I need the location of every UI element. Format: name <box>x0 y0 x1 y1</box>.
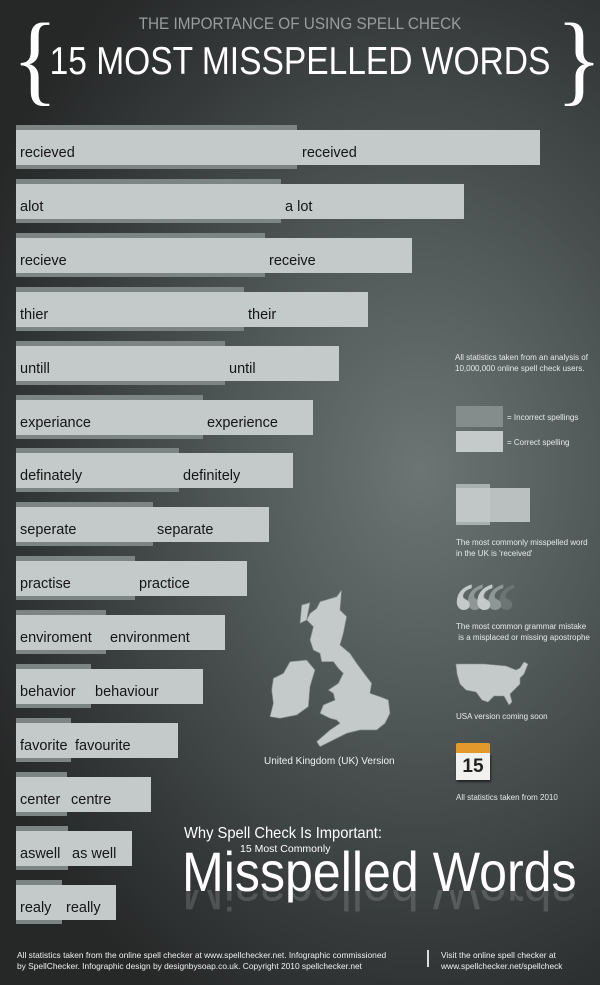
bar chart: realy <box>20 900 51 916</box>
big words: Misspelled Words <box>182 840 577 903</box>
footer link <box>441 950 562 971</box>
bar chart: practise <box>20 576 71 592</box>
bottom title <box>182 825 577 920</box>
bar chart: recieve <box>20 253 67 269</box>
bar chart: experiance <box>20 415 91 431</box>
bar chart: received <box>302 145 357 161</box>
bar chart: behaviour <box>95 684 159 700</box>
footer credits: All statistics taken from the online spell checker at www.spellchecker.net. Infographic commissioned <box>17 950 386 960</box>
why heading: Why Spell Check Is Important: <box>184 825 382 842</box>
icon: calendar: 15 <box>462 756 484 777</box>
bar chart: centre <box>71 792 111 808</box>
text: grammar note: The most common grammar mistake <box>456 622 586 631</box>
bar chart: alot <box>20 199 43 215</box>
bar chart: enviroment <box>20 630 92 646</box>
text: received note: The most commonly misspelled word in the UK is 'received' <box>456 538 588 558</box>
subtitle: THE IMPORTANCE OF USING SPELL CHECK <box>139 14 461 33</box>
bar chart: a lot <box>285 199 312 215</box>
legend: = Correct spelling <box>507 438 569 447</box>
bar chart: behavior <box>20 684 76 700</box>
footer credits <box>17 950 386 971</box>
stats note: All statistics taken from an analysis of 10,000,000 online spell check users. <box>455 353 588 373</box>
bar chart: until <box>229 361 256 377</box>
text: year note: All statistics taken from 2010 <box>456 793 558 802</box>
bar chart: seperate <box>20 522 76 538</box>
bar chart: their <box>248 307 276 323</box>
bar chart: environment <box>110 630 190 646</box>
bar chart: recieved <box>20 145 75 161</box>
UK map <box>270 590 390 747</box>
bar chart: center <box>20 792 60 808</box>
bar chart: separate <box>157 522 213 538</box>
UK label: United Kingdom (UK) Version <box>264 756 395 767</box>
bar chart: favorite <box>20 738 68 754</box>
bar chart: thier <box>20 307 48 323</box>
icon: quote marks: “ <box>474 562 518 673</box>
bar chart: definitely <box>183 468 240 484</box>
bar chart: really <box>66 900 101 916</box>
bar chart: definately <box>20 468 82 484</box>
icon: USA map <box>456 662 528 706</box>
text: grammar note <box>456 622 590 642</box>
icon: quote marks <box>452 562 518 673</box>
icon: received bar <box>456 484 530 525</box>
icon: quote marks: “ <box>463 562 507 673</box>
footer link: www.spellchecker.net/spellcheck <box>441 961 562 971</box>
bar chart: aswell <box>20 846 60 862</box>
title: 15 MOST MISSPELLED WORDS <box>50 40 550 83</box>
bar chart: favourite <box>75 738 131 754</box>
bar chart: experience <box>207 415 278 431</box>
text: USA note: USA version coming soon <box>456 712 548 721</box>
bar chart: as well <box>72 846 116 862</box>
left brace: { <box>12 2 58 115</box>
footer credits: by SpellChecker. Infographic design by designbysoap.co.uk. Copyright 2010 spellchecker.net <box>17 961 362 971</box>
legend: = Incorrect spellings <box>507 413 578 422</box>
text: grammar note: is a misplaced or missing apostrophe <box>458 633 590 642</box>
icon: quote marks: “ <box>452 562 496 673</box>
small subtitle: 15 Most Commonly <box>240 843 330 855</box>
icon: calendar <box>456 743 492 783</box>
header <box>12 2 600 115</box>
legend <box>456 406 578 452</box>
footer link: Visit the online spell checker at <box>441 950 556 960</box>
bar chart: untill <box>20 361 50 377</box>
bar chart: practice <box>139 576 190 592</box>
bar chart: receive <box>269 253 316 269</box>
